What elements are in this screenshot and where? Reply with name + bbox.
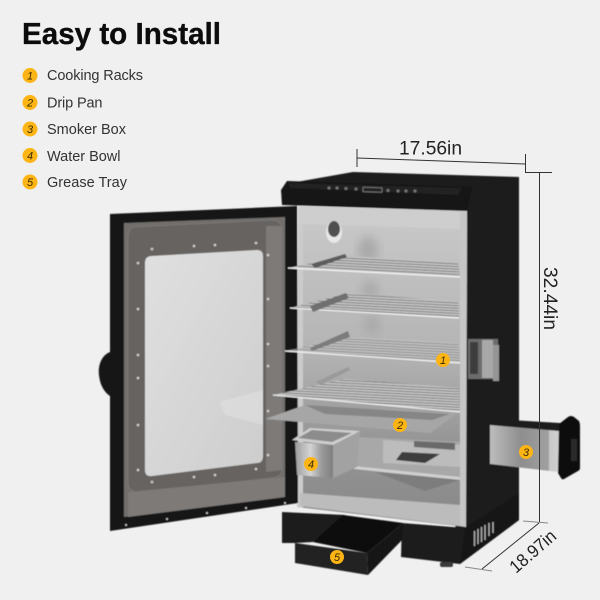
dimension: depth — [465, 523, 560, 577]
legend item: grease tray: 5 — [27, 177, 34, 189]
control panel — [281, 181, 472, 211]
legend item: smoker box: 3 — [27, 124, 34, 136]
dimension: depth: 18.97in — [506, 526, 560, 577]
door right lighter strip — [266, 226, 282, 472]
box face — [490, 425, 559, 472]
foot — [440, 562, 453, 567]
callout 2: drip pan: 2 — [396, 420, 403, 432]
interior back wall — [297, 206, 467, 527]
callout 2: drip pan — [393, 418, 407, 432]
cabinet base shading — [460, 493, 519, 564]
door gasket outline — [128, 220, 282, 492]
callout 3: smoker box: 3 — [523, 447, 530, 459]
callout 5: grease tray: 5 — [334, 552, 341, 564]
interior top strip — [298, 206, 467, 229]
temperature probe vent — [326, 221, 342, 243]
door frame — [110, 206, 298, 531]
legend item: water bowl: 4 — [27, 150, 33, 162]
door screws — [125, 242, 286, 526]
legend item: drip pan: Drip Pan — [47, 96, 102, 112]
drip pan — [265, 405, 458, 433]
callout 4: water bowl — [304, 457, 318, 471]
tray front — [295, 543, 368, 575]
lower firebox — [300, 437, 460, 526]
interior wall blotches — [358, 236, 380, 335]
dimension: width — [357, 138, 526, 172]
legend item: water bowl: Water Bowl — [47, 149, 120, 165]
legend — [22, 68, 143, 191]
door window — [145, 250, 263, 476]
cabinet top and right side — [285, 172, 519, 564]
box top edge — [490, 419, 560, 432]
interior left edge — [297, 224, 303, 508]
door inner panel — [124, 217, 285, 517]
tray right side — [367, 523, 403, 575]
legend item: grease tray: Grease Tray — [47, 175, 128, 191]
base and grease tray — [282, 512, 465, 575]
legend item: smoker box: Smoker Box — [47, 122, 127, 138]
callout 1: cooking racks — [436, 353, 450, 367]
door window reflection — [220, 390, 263, 425]
cooking rack 2 — [290, 293, 459, 318]
callout 4: water bowl: 4 — [308, 459, 314, 471]
tray interior — [313, 515, 403, 553]
box handle — [558, 416, 580, 479]
cooking rack 1 — [288, 254, 460, 277]
base right block — [401, 523, 465, 564]
legend item: drip pan — [22, 95, 102, 112]
callout 3: smoker box — [519, 445, 533, 459]
rear latch bracket — [468, 339, 499, 381]
smoker box — [490, 416, 580, 479]
door lower strip — [128, 477, 285, 517]
cabinet — [281, 172, 519, 564]
base left block — [282, 512, 345, 543]
title: Easy to Install — [22, 16, 221, 51]
door — [99, 206, 298, 531]
cooking rack 3 — [285, 331, 460, 363]
interior right edge — [460, 212, 467, 527]
side vents — [474, 522, 493, 546]
callout 5: grease tray — [330, 550, 344, 564]
callout 1: cooking racks: 1 — [440, 355, 446, 367]
dimension: height: 32.44in — [539, 267, 560, 330]
legend item: cooking racks: 1 — [27, 70, 33, 82]
door knob — [99, 352, 110, 396]
smoker body — [99, 172, 580, 575]
cooking rack 4 — [273, 367, 460, 412]
legend item: cooking racks: Cooking Racks — [47, 68, 143, 84]
legend item: drip pan: 2 — [26, 98, 33, 110]
water bowl — [292, 428, 360, 478]
dimension: width: 17.56in — [399, 138, 462, 160]
